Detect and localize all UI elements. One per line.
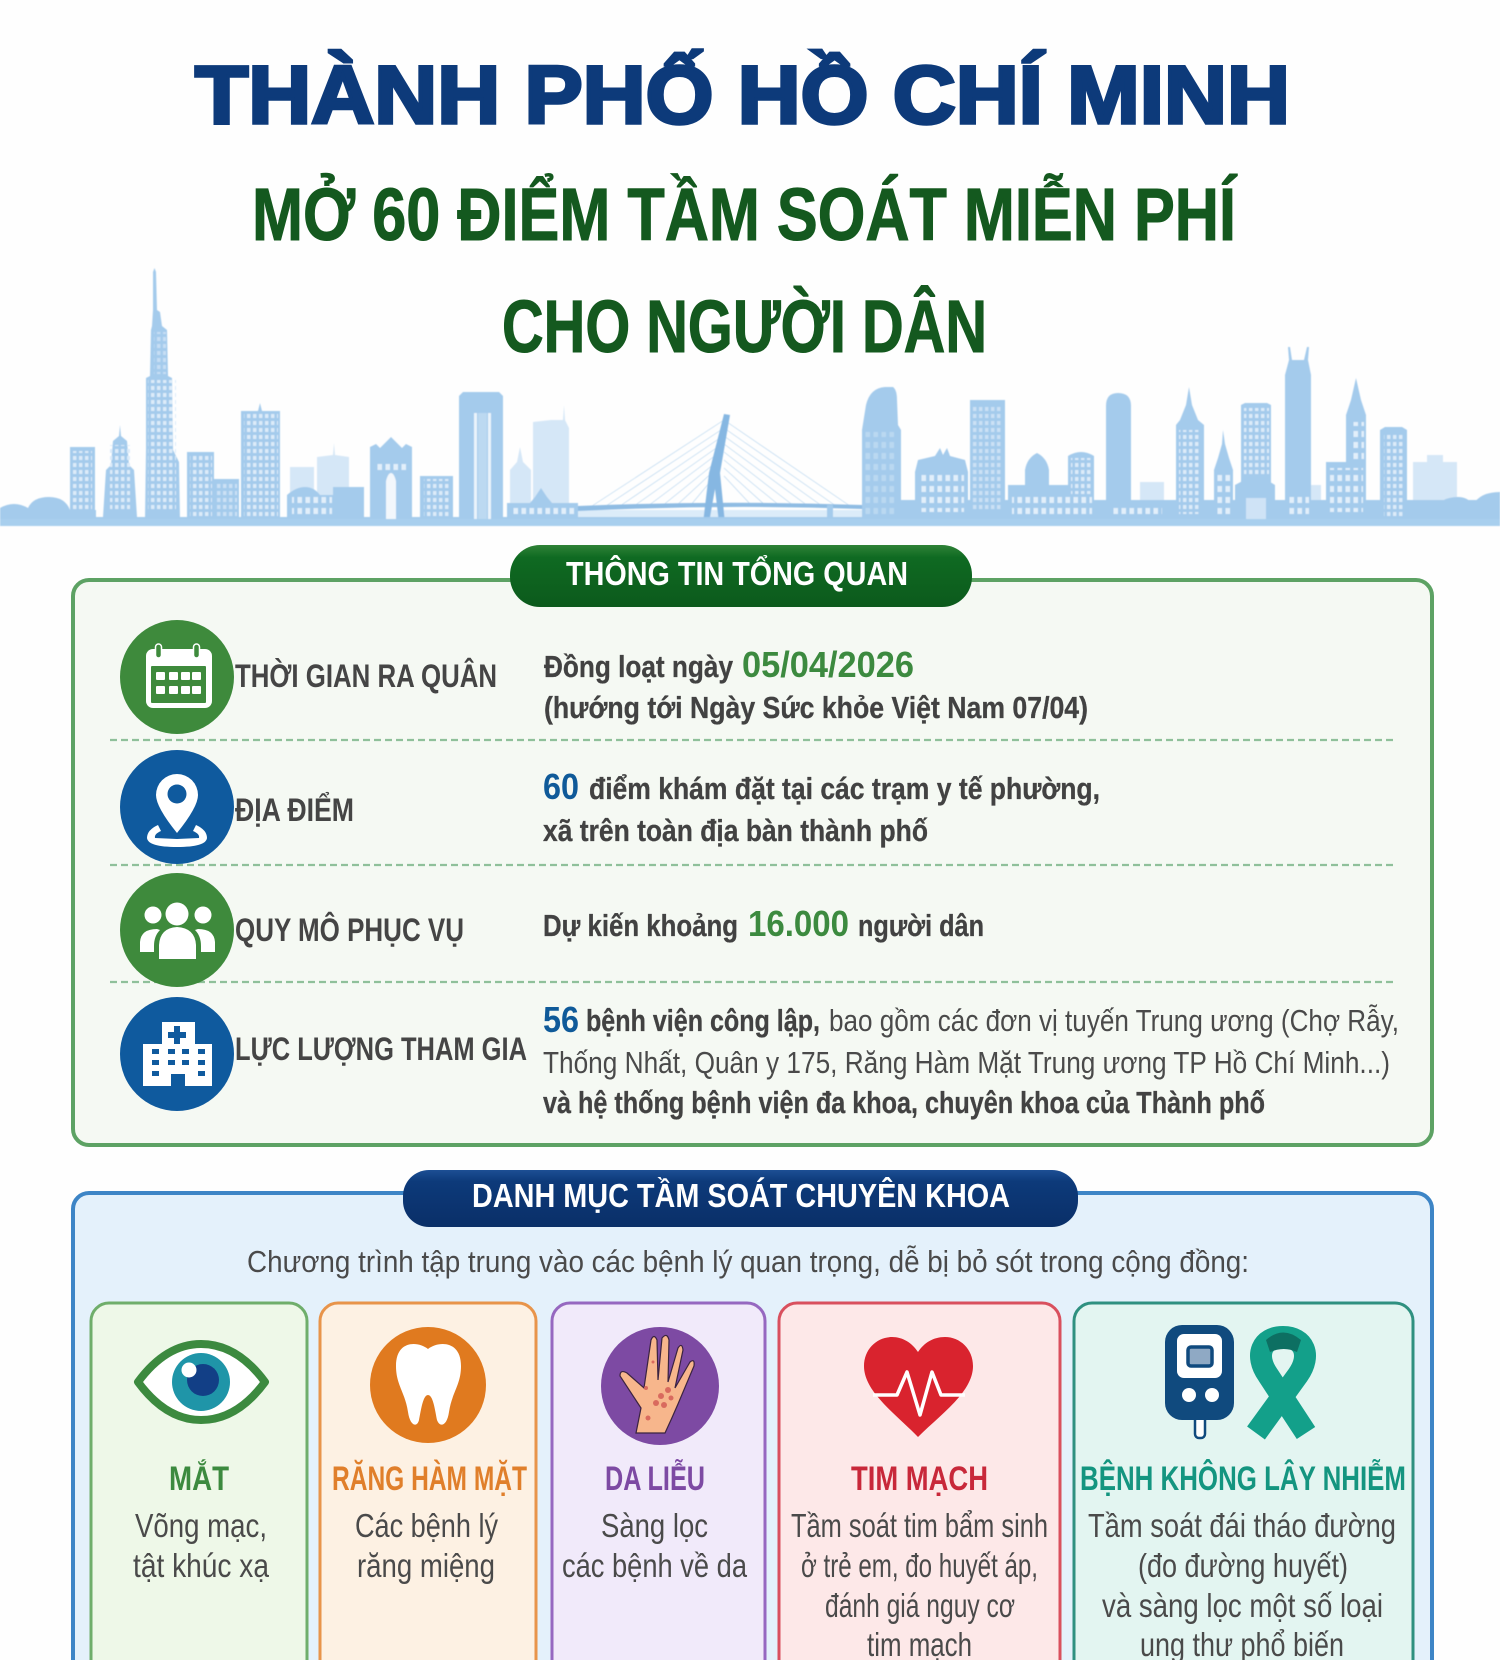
card: cardiology bbox=[779, 1303, 1060, 1660]
left domes and ground bbox=[0, 497, 96, 526]
text: capacity: Dự kiến khoảng bbox=[543, 908, 738, 943]
card: eye: MẮT bbox=[169, 1460, 229, 1498]
label: participants: LỰC LƯỢNG THAM GIA bbox=[235, 1031, 527, 1067]
window patterns bbox=[73, 332, 1404, 520]
panel: specialty screening bbox=[73, 1170, 1432, 1660]
card: cardiology: Tầm soát tim bẩm sinh bbox=[791, 1507, 1048, 1544]
text: places: điểm khám đặt tại các trạm y tế phường, bbox=[589, 771, 1100, 806]
card: dental: Các bệnh lý bbox=[355, 1507, 498, 1544]
text: capacity: 16.000 bbox=[748, 903, 849, 944]
icon: hand bbox=[601, 1327, 719, 1445]
icon: glucose meter bbox=[1165, 1325, 1234, 1438]
section heading pill: THÔNG TIN TỔNG QUAN bbox=[566, 554, 908, 592]
card: non-communicable diseases: và sàng lọc một số loại bbox=[1102, 1587, 1383, 1624]
text: places bbox=[543, 766, 1100, 848]
icon: heart bbox=[864, 1337, 973, 1437]
section heading pill: DANH MỤC TẦM SOÁT CHUYÊN KHOA bbox=[472, 1177, 1010, 1214]
card: non-communicable diseases: (đo đường huyết) bbox=[1138, 1547, 1348, 1584]
section heading pill bbox=[403, 1170, 1078, 1227]
text: hospitals bbox=[543, 999, 1399, 1120]
card: non-communicable diseases: BỆNH KHÔNG LÂY NHIỄM bbox=[1080, 1459, 1406, 1498]
title: THÀNH PHỐ HỒ CHÍ MINH bbox=[195, 50, 1290, 141]
gate tower slots bbox=[474, 413, 477, 519]
icon: tooth bbox=[370, 1327, 486, 1443]
card: cardiology: đánh giá nguy cơ bbox=[825, 1587, 1015, 1624]
text: date: 05/04/2026 bbox=[742, 644, 914, 685]
text: places: xã trên toàn địa bàn thành phố bbox=[543, 813, 928, 848]
card: dental bbox=[320, 1303, 536, 1660]
card: dermatology: Sàng lọc bbox=[601, 1507, 708, 1544]
card: dermatology bbox=[552, 1303, 765, 1660]
card: eye: tật khúc xạ bbox=[133, 1547, 270, 1584]
main buildings bbox=[0, 268, 1500, 526]
text: date: (hướng tới Ngày Sức khỏe Việt Nam 07/04) bbox=[544, 690, 1088, 725]
card: cardiology: TIM MẠCH bbox=[851, 1460, 988, 1498]
text: capacity: người dân bbox=[858, 908, 984, 943]
text: hospitals: bệnh viện công lập, bbox=[586, 1003, 820, 1038]
title: MỞ 60 ĐIỂM TẦM SOÁT MIỄN PHÍ bbox=[252, 173, 1238, 256]
card: dental: răng miệng bbox=[357, 1547, 495, 1584]
text: hospitals: bao gồm các đơn vị tuyến Trung ương (Chợ Rẫy, bbox=[829, 1003, 1399, 1038]
card: non-communicable diseases bbox=[1074, 1303, 1413, 1660]
right side bbox=[862, 500, 1500, 526]
card: eye bbox=[91, 1303, 307, 1660]
title bbox=[195, 50, 1290, 368]
panel: overview bbox=[73, 545, 1432, 1145]
label: time: THỜI GIAN RA QUÂN bbox=[235, 658, 497, 694]
card: non-communicable diseases: Tầm soát đái tháo đường bbox=[1088, 1507, 1396, 1544]
text: hospitals: 56 bbox=[543, 999, 579, 1040]
card: cardiology: ở trẻ em, đo huyết áp, bbox=[801, 1547, 1038, 1584]
card: eye: Võng mạc, bbox=[135, 1507, 267, 1544]
text: places: 60 bbox=[543, 766, 579, 807]
card: dermatology: các bệnh về da bbox=[562, 1547, 748, 1584]
intro text: Chương trình tập trung vào các bệnh lý quan trọng, dễ bị bỏ sót trong cộng đồng: bbox=[247, 1244, 1249, 1279]
bridge bbox=[578, 414, 863, 523]
card: dermatology: DA LIỄU bbox=[605, 1460, 705, 1498]
icon: eye bbox=[138, 1344, 265, 1420]
icon: calendar bbox=[120, 620, 234, 734]
text: capacity bbox=[543, 903, 984, 944]
city skyline illustration bbox=[0, 268, 1500, 526]
card: dental: RĂNG HÀM MẶT bbox=[332, 1460, 527, 1498]
label: location: ĐỊA ĐIỂM bbox=[235, 792, 354, 828]
icon: awareness ribbon bbox=[1256, 1332, 1306, 1433]
panel frame bbox=[73, 1193, 1432, 1660]
text: hospitals: và hệ thống bệnh viện đa khoa, chuyên khoa của Thành phố bbox=[543, 1085, 1265, 1120]
section heading pill bbox=[510, 545, 972, 607]
ground strip bbox=[0, 519, 1500, 526]
text: date: Đồng loạt ngày bbox=[544, 649, 734, 684]
pale background buildings bbox=[290, 405, 1457, 522]
icon: people bbox=[120, 873, 234, 987]
label: scale: QUY MÔ PHỤC VỤ bbox=[235, 912, 464, 948]
title: CHO NGƯỜI DÂN bbox=[502, 285, 987, 368]
icon: hospital bbox=[120, 997, 234, 1111]
icon: location pin bbox=[120, 750, 234, 864]
panel frame bbox=[73, 580, 1432, 1145]
text: date bbox=[544, 644, 1088, 725]
